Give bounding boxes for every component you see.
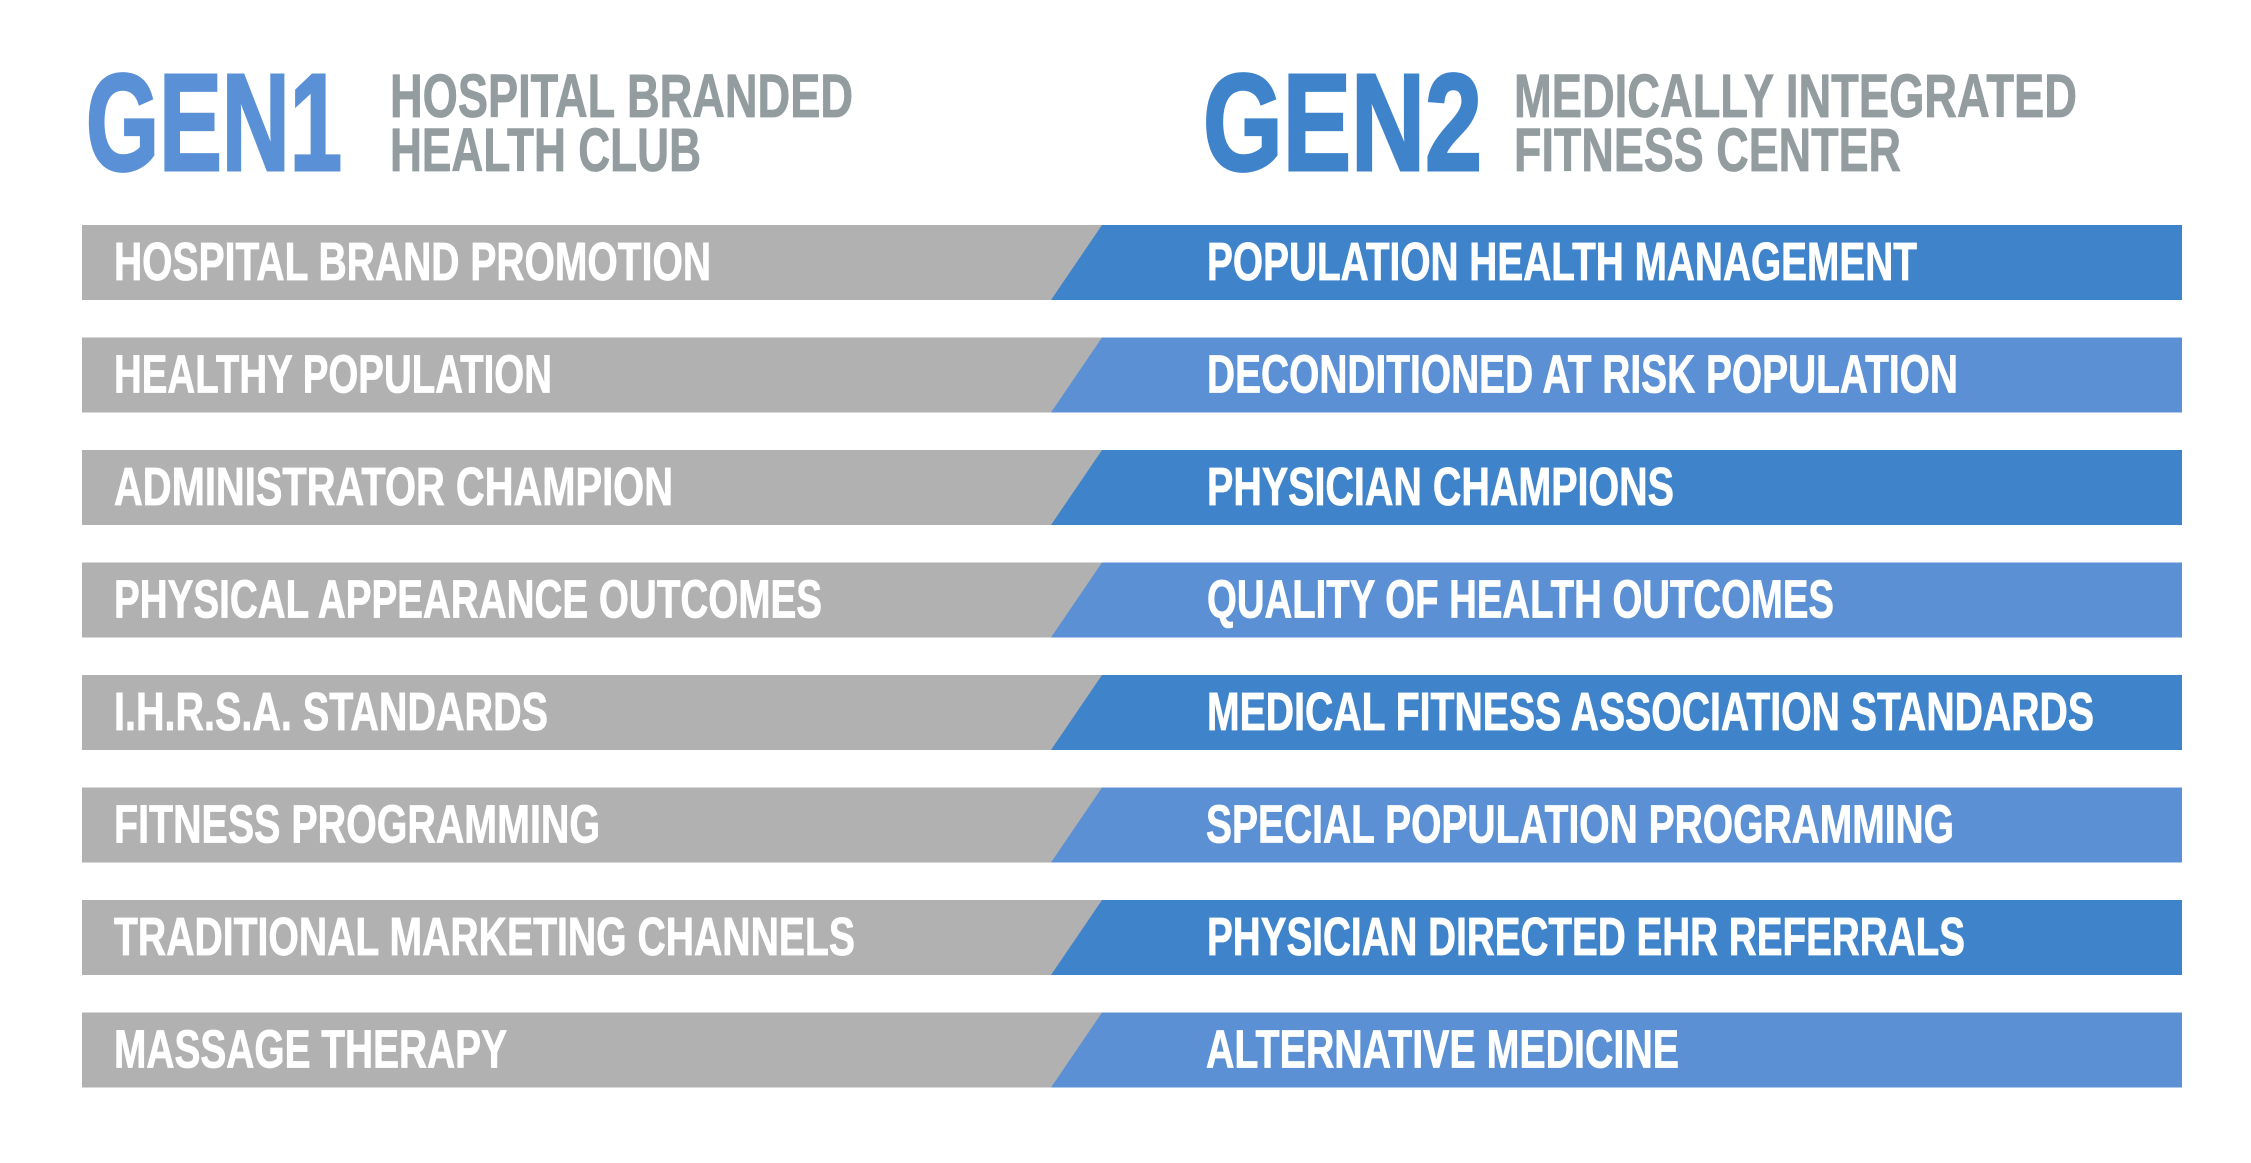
row 3: administrator vs physician champions <box>82 450 2182 525</box>
row 4: appearance vs health outcomes <box>82 562 2182 638</box>
subtitle: medically integrated fitness center: FITNESS CENTER <box>1514 116 1901 184</box>
row 2: healthy vs deconditioned population: HEALTHY POPULATION <box>114 346 552 404</box>
title: GEN2: GEN2 <box>1203 46 1482 200</box>
row 7: marketing channels vs EHR referrals: TRADITIONAL MARKETING CHANNELS <box>114 908 855 967</box>
row 8: massage therapy vs alternative medicine <box>82 1012 2182 1088</box>
row 8: massage therapy vs alternative medicine: ALTERNATIVE MEDICINE <box>1206 1020 1679 1080</box>
row 3: administrator vs physician champions: PHYSICIAN CHAMPIONS <box>1207 458 1674 517</box>
row 6: fitness vs special population programming <box>82 788 2182 862</box>
row 5: IHRSA vs MFA standards: I.H.R.S.A. STANDARDS <box>114 683 548 742</box>
row 5: IHRSA vs MFA standards <box>82 675 2182 750</box>
subtitle: medically integrated fitness center: MEDICALLY INTEGRATED <box>1514 62 2077 130</box>
row 1: brand promotion vs population health: HOSPITAL BRAND PROMOTION <box>114 233 711 292</box>
row 2: healthy vs deconditioned population: DECONDITIONED AT RISK POPULATION <box>1207 346 1958 404</box>
row 6: fitness vs special population programming: SPECIAL POPULATION PROGRAMMING <box>1206 796 1954 854</box>
row 4: appearance vs health outcomes: QUALITY OF HEALTH OUTCOMES <box>1207 570 1834 630</box>
row 7: marketing channels vs EHR referrals <box>82 900 2182 975</box>
row 3: administrator vs physician champions: ADMINISTRATOR CHAMPION <box>114 458 673 517</box>
subtitle: hospital branded health club: HEALTH CLUB <box>390 116 701 184</box>
row 7: marketing channels vs EHR referrals: PHYSICIAN DIRECTED EHR REFERRALS <box>1207 908 1965 967</box>
title: GEN1: GEN1 <box>86 46 342 200</box>
row 2: healthy vs deconditioned population <box>82 338 2182 412</box>
subtitle: medically integrated fitness center <box>1514 62 2077 184</box>
row 6: fitness vs special population programming: FITNESS PROGRAMMING <box>114 796 600 854</box>
row 8: massage therapy vs alternative medicine: MASSAGE THERAPY <box>114 1020 507 1080</box>
row 1: brand promotion vs population health: POPULATION HEALTH MANAGEMENT <box>1207 233 1917 292</box>
subtitle: hospital branded health club: HOSPITAL BRANDED <box>390 62 853 130</box>
row 4: appearance vs health outcomes: PHYSICAL APPEARANCE OUTCOMES <box>114 570 822 630</box>
heading: GEN2 medically integrated fitness center <box>1203 46 2077 200</box>
heading: GEN1 hospital branded health club <box>86 46 853 200</box>
subtitle: hospital branded health club <box>390 62 853 184</box>
row 1: brand promotion vs population health <box>82 225 2182 300</box>
